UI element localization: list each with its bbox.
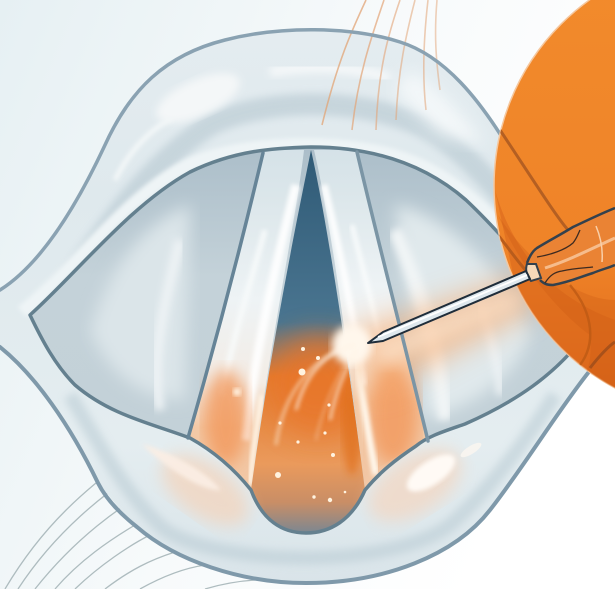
membrane shading band — [55, 104, 560, 300]
sphere inner outlines — [500, 130, 568, 230]
vocal fold: right — [314, 150, 428, 490]
membrane pale rim — [22, 145, 590, 330]
left fold orange glow — [204, 370, 248, 466]
lower lip shade — [70, 395, 555, 558]
orange sphere — [494, 0, 615, 420]
right fold orange glow — [368, 365, 418, 465]
top band highlight — [270, 68, 390, 78]
syringe body — [527, 208, 615, 285]
left highlight — [115, 118, 172, 180]
cavity outline — [30, 147, 585, 533]
lower lobes — [142, 434, 483, 540]
vocal fold: left — [190, 150, 304, 488]
fibres: lower left grey — [5, 435, 255, 589]
syringe outline — [527, 208, 615, 263]
membrane upper right pale — [395, 70, 485, 145]
right lobe glow — [356, 434, 474, 536]
cavity soft highlights — [90, 205, 190, 400]
right fold white streak — [324, 185, 364, 385]
sparkles — [275, 347, 346, 502]
sphere lower shade — [496, 193, 615, 388]
top highlight — [150, 63, 246, 133]
syringe — [368, 208, 615, 343]
right lobe highlight — [401, 447, 461, 499]
needle hub — [526, 264, 541, 281]
left lobe glow — [149, 440, 261, 540]
needle — [368, 271, 530, 343]
glottis opening — [233, 150, 366, 533]
left fold white streak — [245, 185, 296, 440]
fold lines — [188, 153, 263, 438]
outer outline — [0, 30, 612, 325]
injection glow beam — [296, 270, 535, 420]
left fold edge highlight — [250, 395, 262, 485]
fibres: upper orange — [322, 0, 440, 130]
glottic cavity — [32, 148, 566, 477]
left lobe highlight — [142, 444, 221, 490]
right fold edge highlight — [357, 360, 376, 475]
